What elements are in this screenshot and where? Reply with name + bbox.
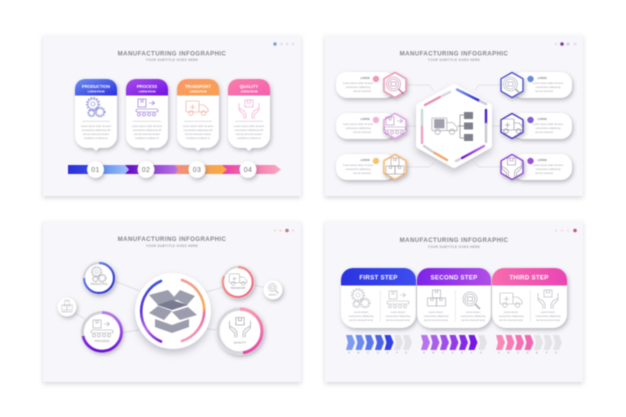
right callout 2: sed do eiusmod — [535, 131, 553, 134]
heading: MANUFACTURING INFOGRAPHIC — [118, 236, 227, 243]
card: third step: Lorem ipsum — [541, 311, 555, 314]
chevron row: blue: E — [387, 352, 389, 354]
arrow timeline — [68, 161, 281, 178]
card: second step: consectetur adipiscing — [424, 315, 449, 318]
chevron row: purple: C — [442, 352, 444, 354]
circle: search — [264, 280, 282, 300]
card: third step: consectetur adipiscing — [536, 315, 561, 318]
page indicator dots — [274, 229, 294, 232]
page indicator dots — [273, 42, 294, 46]
left callout 1: LOREM — [360, 76, 370, 80]
central hexagon — [419, 87, 489, 165]
right callout 3: sed do eiusmod — [535, 172, 553, 175]
connector lines — [405, 85, 503, 167]
card: quality: QUALITY — [240, 84, 258, 89]
card: transport: consectetur adipiscing elit — [184, 129, 213, 132]
circle: process — [82, 312, 122, 352]
left callout 1: consectetur adipiscing — [346, 86, 371, 89]
chevron row: pink — [496, 335, 562, 354]
right callout 1: LOREM — [537, 76, 547, 80]
left callout 2: LOREM — [360, 117, 370, 121]
icon: truck — [500, 293, 522, 307]
icon: gears — [92, 267, 106, 282]
right callout 3: LOREM — [537, 158, 547, 162]
chevron row: pink: C — [517, 352, 519, 354]
chevron row: purple: B — [433, 352, 435, 354]
panel: production timeline — [43, 35, 301, 196]
chevron row: purple — [421, 335, 487, 354]
icon: open box — [149, 290, 197, 333]
subtitle: YOUR SUBTITLE GOES HERE — [146, 58, 198, 62]
card: second step: sed do eiusmod temp — [461, 319, 486, 322]
circle: parcels — [58, 298, 76, 316]
left callout 2: sed do eiusmod — [353, 131, 371, 134]
right callout 2: LOREM — [537, 117, 547, 121]
card: first step: Lorem ipsum — [354, 311, 368, 314]
chevron row: purple: F — [471, 352, 473, 354]
right callout 1 — [501, 72, 572, 98]
right callout 1: sed do eiusmod — [535, 90, 553, 93]
icon: gears — [352, 289, 370, 308]
card: production: Lorem ipsum dolor sit amet — [81, 125, 111, 128]
card: first step: FIRST STEP — [359, 274, 398, 282]
chevron row: pink: A — [498, 352, 500, 354]
card: process: Lorem ipsum dolor sit amet — [132, 125, 162, 128]
icon: boxes — [386, 158, 404, 174]
center circle: open box — [135, 273, 211, 349]
right callout 3 — [501, 154, 572, 180]
icon: conveyor — [384, 117, 406, 134]
heading: MANUFACTURING INFOGRAPHIC — [118, 50, 227, 58]
card: quality: sed do eiusmod tempor — [236, 133, 262, 136]
chevron row: pink: B — [508, 352, 510, 354]
card: third step: sed do eiusmod temp — [536, 319, 561, 322]
card: process: sed do eiusmod tempor — [134, 133, 160, 136]
circle: quality — [216, 307, 264, 355]
subtitle: YOUR SUBTITLE GOES HERE — [428, 58, 480, 62]
card: second step: consectetur adipiscing — [461, 315, 486, 318]
circle: quality: QUALITY — [234, 340, 246, 344]
icon: gears — [87, 98, 105, 117]
step 03 — [188, 161, 206, 178]
right callout 2: Lorem ipsum dolor sit amet — [533, 123, 563, 126]
card: process: LOREM IPSUM — [139, 90, 155, 94]
card: quality: incididunt ut labore et — [237, 137, 261, 140]
card: first step — [341, 268, 416, 328]
card: quality — [228, 79, 270, 151]
icon: conveyor — [387, 291, 409, 308]
circle: parcels: INVENTORY — [61, 312, 73, 314]
card: production: sed do eiusmod tempor — [83, 133, 109, 136]
panel: steps — [325, 221, 583, 382]
step 02 — [138, 161, 154, 178]
page indicator dots — [555, 42, 576, 46]
panel: circle diagram — [43, 221, 301, 382]
heading: MANUFACTURING INFOGRAPHIC — [400, 50, 509, 58]
heading: MANUFACTURING INFOGRAPHIC — [400, 237, 509, 244]
step 01 — [87, 161, 104, 178]
card: first step: sed do eiusmod temp — [386, 319, 411, 322]
card: first step: sed do eiusmod temp — [349, 319, 374, 322]
chevron row: pink: F — [546, 352, 548, 354]
icon: delivery truck — [501, 119, 523, 133]
circle: transport — [222, 266, 254, 298]
card: third step: THIRD STEP — [509, 274, 549, 282]
right callout 2: consectetur adipiscing — [536, 127, 561, 130]
icon: search — [386, 77, 404, 94]
card: transport: TRANSPORT — [185, 84, 211, 89]
gradient hexagon segments — [422, 90, 486, 161]
card: third step: consectetur adipiscing — [499, 315, 524, 318]
left callout 2: consectetur adipiscing — [346, 127, 371, 130]
card: transport: LOREM IPSUM — [190, 90, 206, 94]
card: process: PROCESS — [137, 84, 157, 89]
circle: search: INSPECT — [269, 294, 278, 296]
left callout 3: sed do eiusmod — [353, 172, 371, 175]
card: process: incididunt ut labore et — [135, 137, 159, 140]
step 03: 03 — [193, 167, 201, 174]
step 04 — [240, 161, 256, 178]
icon: conveyor — [91, 320, 113, 337]
chevron row: blue: G — [405, 352, 407, 354]
chevron row: blue: F — [396, 352, 398, 354]
card: first step: Lorem ipsum — [391, 311, 405, 314]
card: production: LOREM IPSUM — [88, 90, 104, 94]
chevron row: blue: A — [348, 352, 350, 354]
right callout 1: Lorem ipsum dolor sit amet — [533, 82, 563, 85]
left callout 3: LOREM — [360, 158, 370, 162]
chevron row: blue — [346, 335, 412, 354]
circle: process: PROCESS — [95, 339, 109, 343]
right callout 1: consectetur adipiscing — [536, 86, 561, 89]
left callout 1: Lorem ipsum dolor sit amet — [343, 82, 373, 85]
right callout 3: consectetur adipiscing — [536, 168, 561, 171]
panel: hexagon diagram — [325, 35, 583, 196]
chevron row: pink: G — [555, 352, 557, 354]
card: first step: consectetur adipiscing — [349, 315, 374, 318]
chevron row: purple: A — [423, 352, 425, 354]
card: quality: Lorem ipsum dolor sit amet — [234, 125, 264, 128]
icon: hands holding box — [239, 100, 259, 119]
step 04: 04 — [244, 167, 252, 174]
icon: search — [504, 77, 520, 94]
card: third step: sed do eiusmod temp — [499, 319, 524, 322]
icon: truck — [186, 101, 208, 115]
left callout 1 — [336, 72, 406, 98]
icon: hands — [230, 318, 250, 338]
connector lines — [75, 281, 274, 333]
icon: truck and parcels — [432, 112, 473, 141]
step 01: 01 — [91, 167, 100, 174]
card: second step: SECOND STEP — [430, 274, 478, 282]
step 02: 02 — [142, 167, 150, 174]
card: third step: Lorem ipsum — [504, 311, 518, 314]
left callout 2: Lorem ipsum dolor sit amet — [343, 123, 373, 126]
card: quality: consectetur adipiscing elit — [235, 129, 264, 132]
subtitle: YOUR SUBTITLE GOES HERE — [428, 245, 480, 249]
icon: boxes — [428, 290, 446, 306]
card: quality: LOREM IPSUM — [241, 90, 257, 94]
icon: hands — [538, 290, 558, 309]
right callout 2 — [501, 113, 572, 139]
card: second step: sed do eiusmod temp — [424, 319, 449, 322]
right callout 3: Lorem ipsum dolor sit amet — [533, 164, 563, 167]
subtitle: YOUR SUBTITLE GOES HERE — [146, 244, 198, 248]
circle: transport: TRANSPORT — [230, 287, 246, 290]
chevron row: pink: E — [536, 352, 538, 354]
icon: truck — [229, 274, 247, 285]
chevron row: blue: B — [358, 352, 360, 354]
card: transport — [177, 79, 219, 151]
chevron row: purple: G — [480, 352, 482, 354]
card: second step — [417, 268, 491, 328]
card: production: consectetur adipiscing elit — [82, 129, 111, 132]
circle: production: PRODUCTION — [91, 283, 108, 286]
left callout 1: sed do eiusmod — [353, 90, 371, 93]
card: transport: sed do eiusmod tempor — [185, 133, 211, 136]
icon: search — [463, 292, 480, 309]
left callout 3: Lorem ipsum dolor sit amet — [343, 164, 373, 167]
card: transport: Lorem ipsum dolor sit amet — [183, 125, 213, 128]
chevron row: blue: D — [377, 352, 379, 354]
chevron row: purple: E — [461, 352, 463, 354]
card: third step — [492, 268, 567, 328]
page indicator dots — [555, 229, 577, 232]
card: second step: Lorem ipsum — [466, 311, 480, 314]
left callout 3 — [336, 154, 406, 180]
card: process — [126, 79, 168, 151]
left callout 3: consectetur adipiscing — [346, 168, 371, 171]
card: first step: consectetur adipiscing — [386, 315, 411, 318]
circle: production — [82, 262, 116, 294]
chevron row: blue: C — [367, 352, 369, 354]
icon: conveyor — [136, 99, 158, 116]
chevron row: purple: D — [452, 352, 454, 354]
left callout 2 — [336, 113, 406, 139]
icon: hands — [502, 158, 522, 177]
card: transport: incididunt ut labore et — [186, 137, 210, 140]
card: production: PRODUCTION — [82, 84, 110, 89]
card: second step: Lorem ipsum — [429, 311, 443, 314]
card: process: consectetur adipiscing elit — [133, 129, 162, 132]
card: production — [75, 79, 117, 151]
chevron row: pink: D — [527, 352, 529, 354]
card: production: incididunt ut labore et — [84, 137, 108, 140]
